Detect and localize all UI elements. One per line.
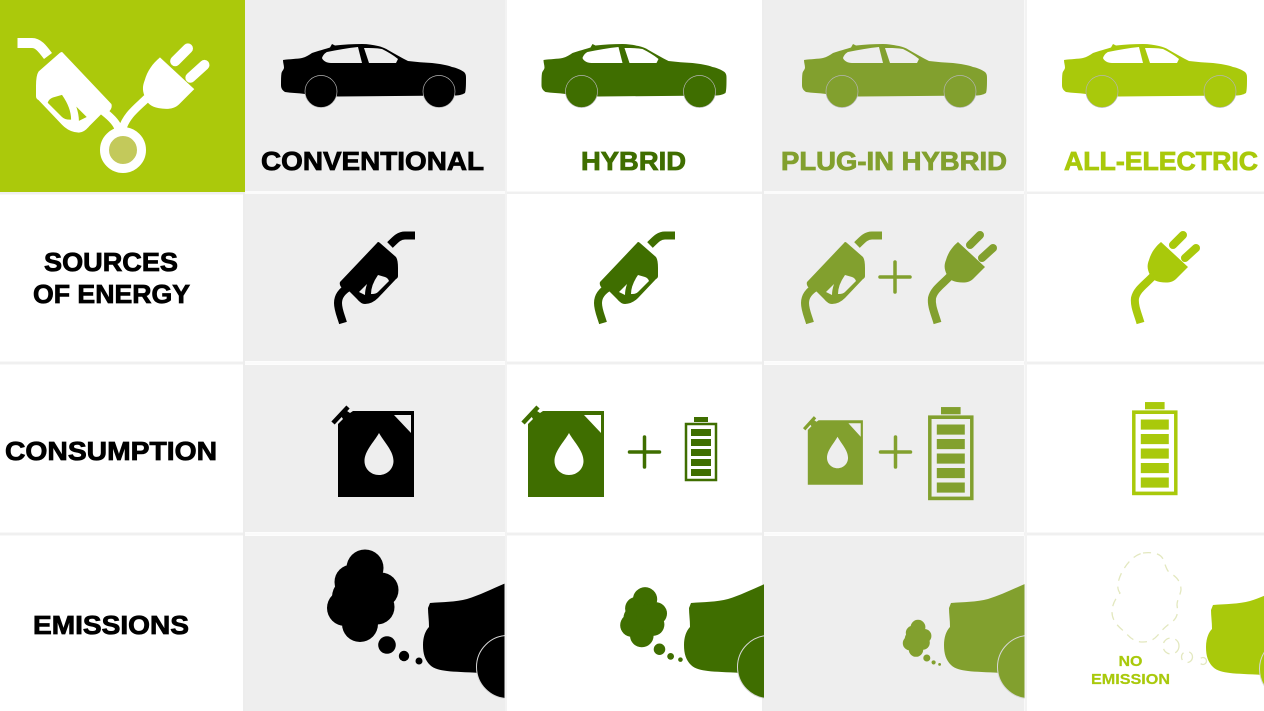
icon: fuel can	[523, 407, 604, 497]
icon: fuel nozzle	[598, 236, 675, 323]
icon: large smoke cloud	[327, 550, 422, 664]
text: no emission: EMISSION	[1091, 671, 1170, 688]
icon: plug	[1135, 235, 1196, 323]
panel: plug-in hybrid consumption	[764, 365, 1024, 532]
icon: plus	[880, 437, 910, 467]
icon: large battery	[1134, 402, 1176, 493]
panel: plug-in hybrid energy sources	[764, 194, 1024, 361]
icon: car rear	[423, 584, 504, 699]
heading: conventional: CONVENTIONAL	[261, 146, 484, 176]
panel: conventional header	[245, 0, 505, 191]
panel: all-electric header	[1027, 0, 1264, 191]
text: no emission: NO	[1118, 653, 1143, 670]
row label: sources of energy: SOURCES	[44, 247, 178, 277]
icon: car rear	[944, 584, 1024, 699]
panel: header logo cell	[0, 0, 245, 192]
icon: mid green car	[802, 44, 987, 108]
icon: fuel nozzle	[805, 236, 882, 323]
panel: hybrid emissions	[620, 584, 764, 698]
icon: fuel can	[333, 407, 414, 497]
panel: all-electric consumption	[1027, 365, 1264, 532]
panel: conventional energy source	[245, 194, 505, 361]
text: no emission	[1091, 653, 1170, 688]
heading: plug-in hybrid: PLUG-IN HYBRID	[781, 146, 1007, 176]
icon: dark green car	[542, 44, 726, 108]
icon: fuel nozzle and plug joined at a ring	[18, 43, 204, 168]
icon: battery	[686, 417, 716, 480]
icon: light green car	[1062, 44, 1247, 108]
panel: all-electric emissions	[1092, 552, 1264, 686]
row label: sources of energy: OF ENERGY	[33, 279, 190, 309]
panel: conventional emissions	[245, 536, 505, 711]
icon: large battery	[930, 407, 972, 498]
icon: dashed empty cloud	[1112, 553, 1206, 664]
heading: all-electric: ALL-ELECTRIC	[1064, 146, 1258, 176]
panel: hybrid header	[507, 0, 762, 191]
icon: plug	[932, 235, 993, 323]
icon: plus	[880, 262, 910, 292]
panel: conventional consumption	[245, 365, 505, 532]
row label: sources of energy	[33, 247, 190, 309]
heading: hybrid: HYBRID	[581, 146, 686, 176]
icon: fuel nozzle	[338, 236, 415, 323]
panel: plug-in hybrid header	[764, 0, 1024, 191]
icon: medium smoke cloud	[620, 587, 683, 662]
icon: car rear	[684, 584, 764, 698]
row label: consumption: CONSUMPTION	[5, 436, 217, 466]
panel: plug-in hybrid emissions	[764, 536, 1024, 711]
panel: hybrid consumption	[507, 365, 762, 532]
icon: small smoke cloud	[903, 620, 941, 666]
panel: hybrid energy source	[507, 194, 762, 361]
icon: car rear	[1206, 596, 1264, 686]
icon: plus	[630, 437, 660, 467]
icon: small fuel can	[804, 417, 863, 485]
row label: emissions: EMISSIONS	[33, 610, 189, 640]
icon: black car	[281, 44, 466, 108]
panel: all-electric energy source	[1027, 194, 1264, 361]
